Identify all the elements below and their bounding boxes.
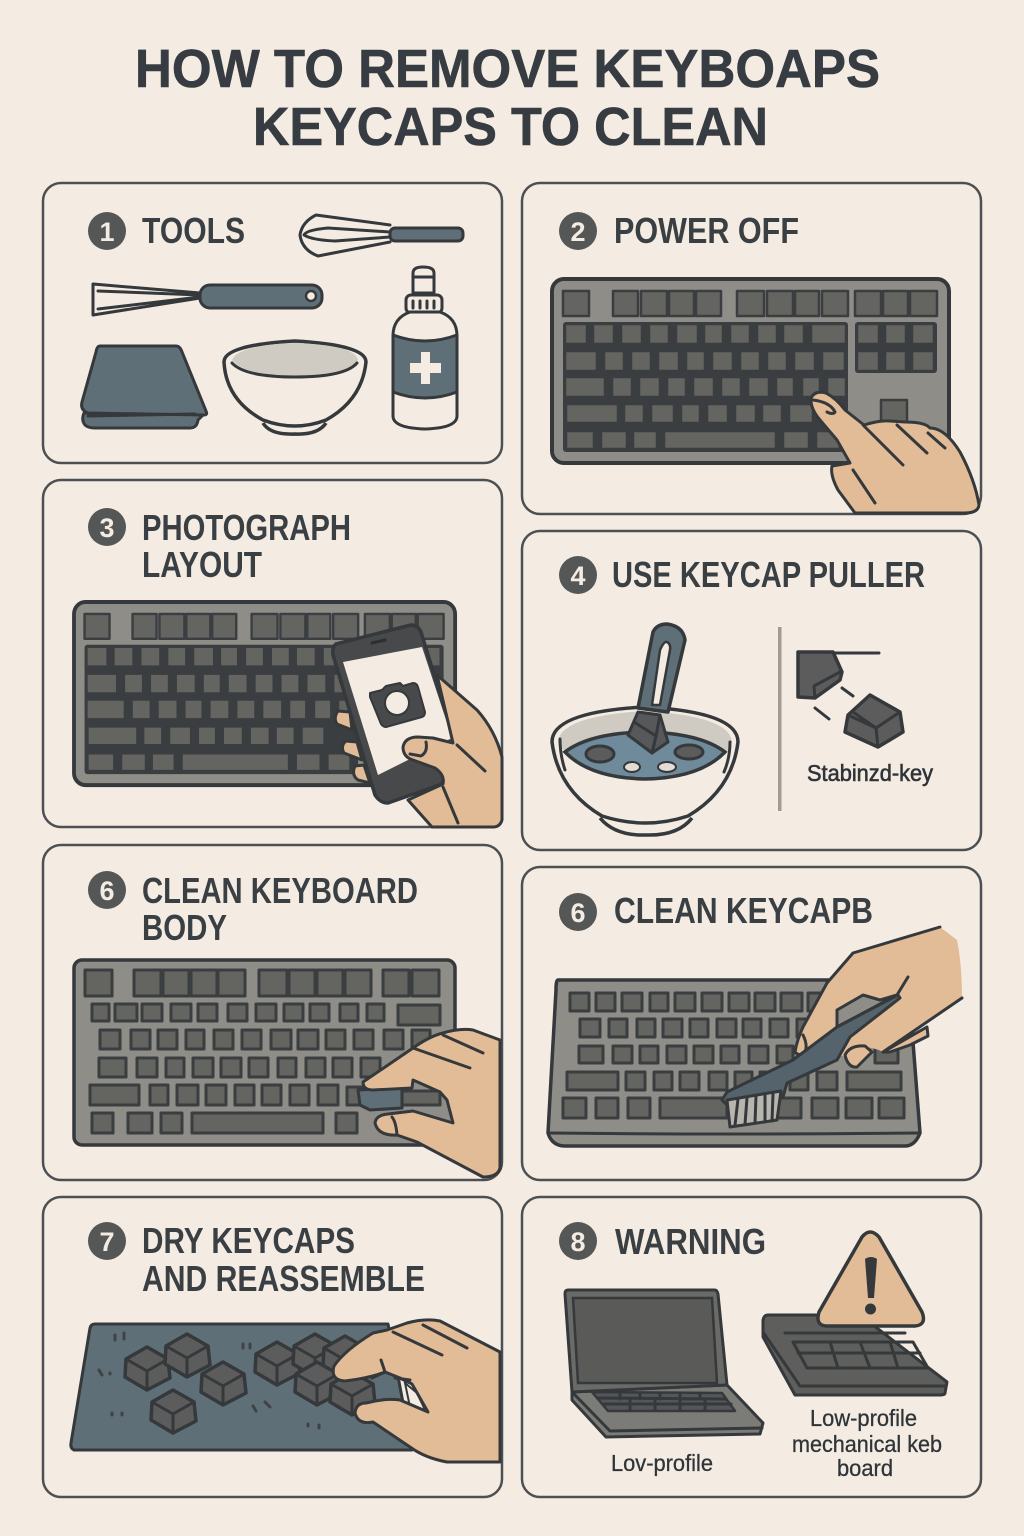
panel: 4 use keycap puller	[522, 531, 981, 850]
step number 1: 1	[99, 217, 115, 247]
step number 6	[88, 871, 126, 909]
label: low-profile mechanical keyboard: mechanical keb	[792, 1431, 942, 1457]
step number 6: 6	[570, 898, 586, 928]
icon: bowl with soaking keycaps	[552, 624, 738, 835]
label: low-profile mechanical keyboard: board	[837, 1455, 893, 1481]
icon: bowl	[224, 341, 366, 434]
heading: dry keycaps and reassemble: AND REASSEMBLE	[142, 1258, 425, 1299]
keyboard	[552, 279, 949, 463]
heading: clean keyboard body	[142, 870, 418, 948]
keyboard	[548, 980, 920, 1146]
icon: whisk	[300, 215, 463, 256]
divider	[778, 627, 782, 811]
icon: hand wiping keyboard	[358, 1029, 500, 1177]
icon: hand holding phone	[333, 625, 502, 827]
icon: puller in bowl	[628, 624, 685, 753]
heading: warning: WARNING	[615, 1221, 766, 1262]
step number 3: 3	[99, 513, 115, 543]
step number 7	[88, 1222, 126, 1260]
heading: tools: TOOLS	[142, 210, 245, 251]
keyboard	[74, 602, 455, 785]
step number 4	[559, 556, 597, 594]
heading: dry keycaps and reassemble: DRY KEYCAPS	[142, 1220, 355, 1261]
icon: hand with brush	[722, 927, 962, 1127]
drying mat	[71, 1324, 412, 1450]
step number 8: 8	[570, 1227, 586, 1257]
icon: warning triangle	[818, 1232, 923, 1326]
step number 4: 4	[570, 561, 586, 591]
icon: hand pressing key	[811, 392, 979, 513]
title: KEYCAPS TO CLEAN	[253, 97, 768, 157]
heading: dry keycaps and reassemble	[142, 1220, 425, 1299]
title: HOW TO REMOVE KEYBOAPS	[135, 39, 880, 99]
icon: folded cloth	[82, 346, 207, 428]
panel: 1 tools	[43, 183, 502, 463]
step number 2	[559, 212, 597, 250]
label: low-profile mechanical keyboard	[792, 1405, 942, 1481]
icon: spray bottle	[393, 267, 457, 429]
step number 3	[88, 508, 126, 546]
label: stabilized key: Stabinzd-key	[807, 760, 933, 786]
icon: keycap diagram	[798, 652, 903, 747]
heading: photograph layout: LAYOUT	[142, 544, 262, 585]
title	[135, 39, 880, 157]
heading: use keycap puller: USE KEYCAP PULLER	[612, 554, 925, 595]
step number 2: 2	[570, 217, 586, 247]
panel: 5 clean keyboard body	[43, 845, 502, 1180]
icon: low-profile keyboard	[763, 1315, 947, 1395]
icon: hand picking keycap	[333, 1320, 500, 1462]
panel: 6 clean keycaps	[522, 867, 981, 1180]
heading: photograph layout	[142, 507, 351, 585]
panel: 2 power off	[522, 183, 981, 514]
icon: laptop	[565, 1290, 763, 1437]
step number 6	[559, 893, 597, 931]
heading: clean keycapb: CLEAN KEYCAPB	[614, 890, 873, 931]
step number 1	[88, 212, 126, 250]
heading: clean keyboard body: CLEAN KEYBOARD	[142, 870, 418, 911]
panel: 3 photograph layout	[43, 480, 502, 827]
label: lov-profile: Lov-profile	[611, 1450, 713, 1476]
icon: keycap puller	[93, 284, 322, 315]
step number 7: 7	[99, 1227, 115, 1257]
panel: 8 warning	[522, 1197, 981, 1497]
keyboard	[74, 960, 455, 1145]
panel: 7 dry keycaps and reassemble	[43, 1197, 502, 1497]
step number 6: 6	[99, 876, 115, 906]
keycaps on mat	[99, 1333, 375, 1433]
label: low-profile mechanical keyboard: Low-profile	[810, 1405, 917, 1431]
heading: photograph layout: PHOTOGRAPH	[142, 507, 351, 548]
heading: clean keyboard body: BODY	[142, 907, 227, 948]
heading: power off: POWER OFF	[614, 210, 799, 251]
step number 8	[559, 1222, 597, 1260]
